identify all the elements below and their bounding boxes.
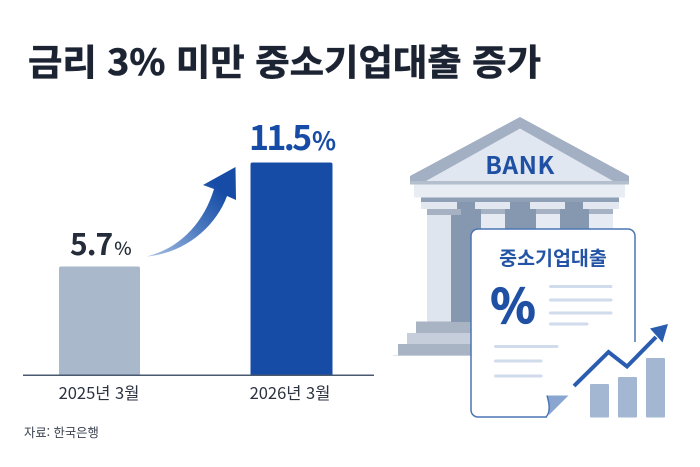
- percent icon: %: [490, 268, 536, 337]
- text lines: [494, 285, 612, 378]
- loan document: [471, 229, 635, 417]
- bar chart: [23, 111, 374, 404]
- title: 금리 3% 미만 중소기업대출 증가: [28, 34, 541, 86]
- source note: 자료: 한국은행: [24, 423, 99, 441]
- mini bar chart: [590, 358, 665, 418]
- steps: [398, 322, 478, 356]
- pediment: [410, 117, 629, 184]
- rising trend arrow: [574, 324, 668, 386]
- bar: 2025: [59, 266, 140, 375]
- growth arrow: [146, 167, 236, 256]
- ground shadow: [393, 355, 483, 356]
- entablature: [414, 184, 625, 198]
- bank sign: BANK: [485, 147, 555, 182]
- columns: [421, 202, 619, 322]
- bar: 2026: [250, 162, 332, 375]
- back wall between columns: [451, 198, 589, 322]
- label: 2025: 2025년 3월: [59, 380, 139, 404]
- document page: [471, 229, 635, 417]
- axis line: [23, 374, 374, 376]
- label: 2026: 2026년 3월: [250, 380, 330, 404]
- document title: 중소기업대출: [499, 242, 607, 271]
- value: 5.7%: 5.7%: [70, 220, 132, 264]
- page fold: [547, 396, 568, 415]
- value: 11.5%: 11.5%: [249, 111, 336, 160]
- bank illustration: [393, 117, 629, 356]
